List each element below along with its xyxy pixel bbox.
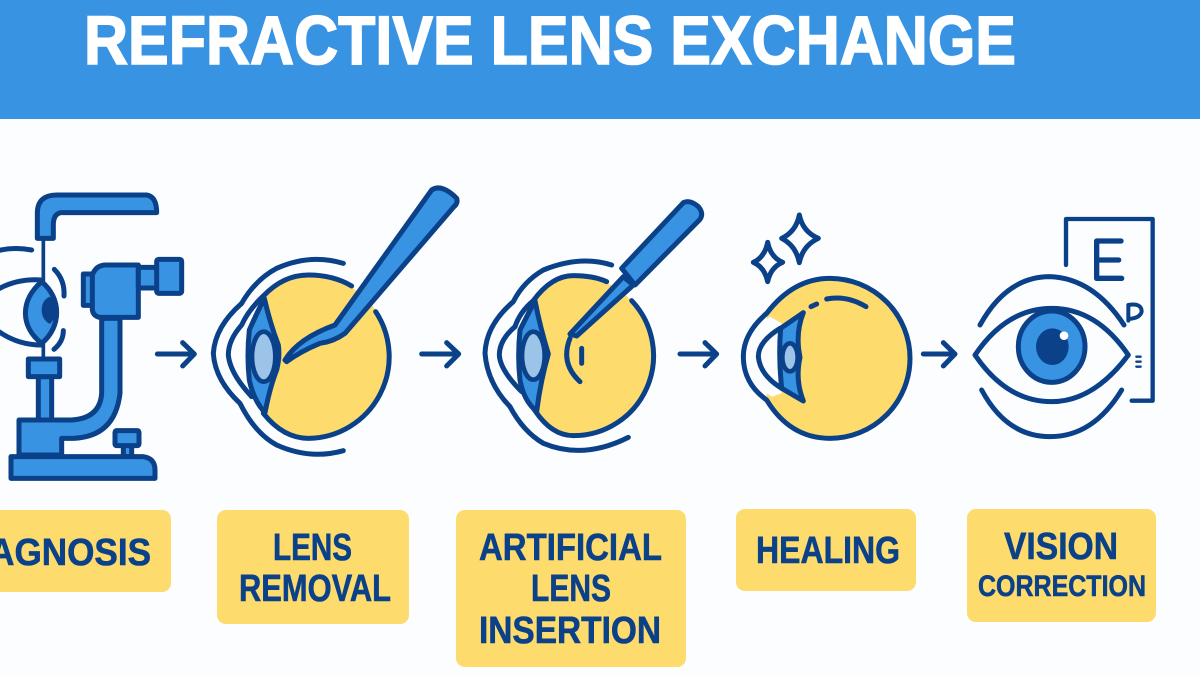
label: lens removal: LENS — [273, 527, 352, 569]
title: REFRACTIVE LENS EXCHANGE — [84, 2, 1016, 79]
icon: eye with lens removal tool — [213, 188, 457, 454]
label: vision correction: CORRECTION — [978, 570, 1146, 603]
label: healing: HEALING — [756, 530, 900, 572]
label: diagnosis — [0, 510, 171, 592]
arrow 3 — [680, 343, 717, 366]
label: vision correction: VISION — [1004, 526, 1118, 568]
arrow 2 — [422, 343, 459, 366]
label: artificial lens insertion: LENS — [531, 568, 611, 610]
icon: corrected eye with eye chart — [975, 219, 1153, 437]
label: lens removal: REMOVAL — [239, 568, 391, 610]
header banner — [0, 0, 1200, 119]
arrow 4 — [923, 343, 955, 366]
label: lens removal — [217, 510, 409, 624]
label: healing — [736, 509, 916, 591]
icon: eye with artificial lens insertion — [485, 202, 702, 450]
arrow 1 — [157, 343, 194, 366]
icon: sparkle stars — [753, 215, 818, 282]
label: artificial lens insertion: ARTIFICIAL — [479, 527, 662, 569]
label: artificial lens insertion: INSERTION — [479, 610, 661, 652]
icon: healing eye with sparkles — [743, 215, 910, 438]
label: vision correction — [967, 509, 1156, 622]
label: artificial lens insertion — [456, 510, 686, 667]
icon: slit lamp with eye — [0, 195, 182, 478]
